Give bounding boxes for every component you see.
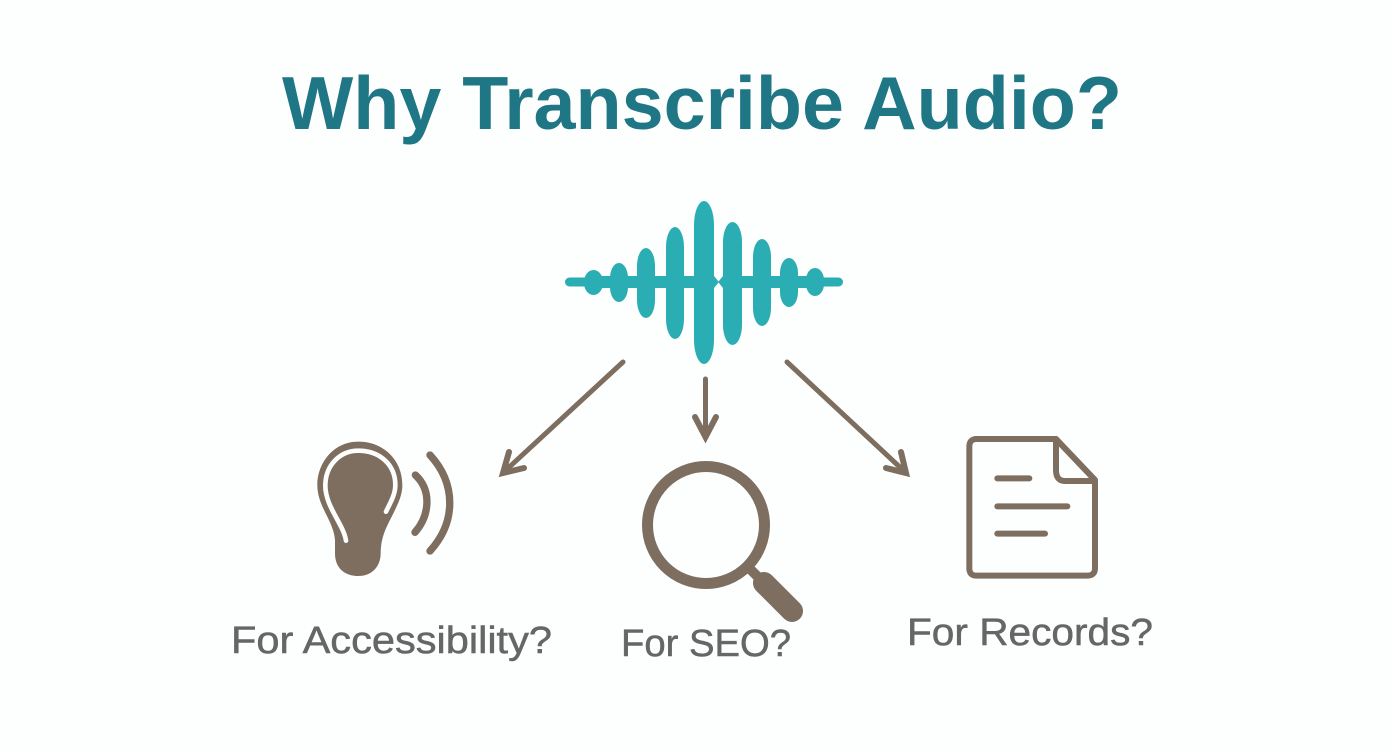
icon: magnifying glass: [648, 466, 792, 611]
title: Why Transcribe Audio?: [282, 61, 1122, 145]
label: for accessibility: For Accessibility?: [231, 620, 552, 662]
icon: ear with sound waves: [317, 442, 450, 576]
icon: document: [969, 439, 1095, 576]
arrow: to accessibility: [503, 362, 623, 473]
label: for records: For Records?: [907, 612, 1153, 654]
icon: sound waveform: [565, 201, 843, 364]
label: for SEO: For SEO?: [621, 623, 791, 665]
arrow: to SEO: [695, 379, 716, 437]
arrow: to records: [787, 362, 906, 473]
